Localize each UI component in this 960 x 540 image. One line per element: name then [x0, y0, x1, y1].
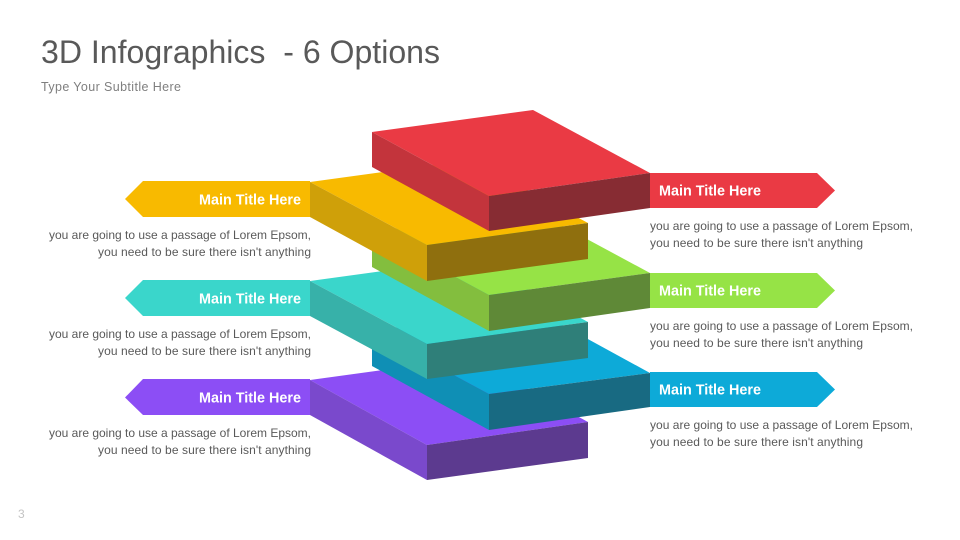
text block: red: you need to be sure there isn't anything — [650, 236, 863, 250]
slab: purple — [310, 358, 588, 480]
slab: red — [372, 110, 650, 231]
text block: blue — [650, 418, 913, 449]
banner: teal left: Main Title Here — [199, 292, 301, 308]
slab: green — [372, 210, 650, 331]
banner: teal left — [125, 280, 310, 316]
subtitle: Type Your Subtitle Here — [41, 80, 181, 94]
text block: green: you need to be sure there isn't anything — [650, 336, 863, 350]
text block: yellow — [49, 228, 311, 259]
text block: purple: you need to be sure there isn't anything — [98, 443, 311, 457]
banner: green right — [650, 273, 835, 308]
slab: teal — [310, 259, 588, 379]
banner: red right — [650, 173, 835, 208]
banner: purple left — [125, 379, 310, 415]
banner: blue right: Main Title Here — [659, 382, 761, 398]
text block: red: you are going to use a passage of Lorem Epsom, — [650, 219, 913, 233]
slab: yellow — [310, 160, 588, 281]
slab: blue — [372, 309, 650, 430]
text block: blue: you are going to use a passage of Lorem Epsom, — [650, 418, 913, 432]
page number: 3 — [18, 507, 25, 521]
text block: yellow: you are going to use a passage of Lorem Epsom, — [49, 228, 311, 242]
text block: purple — [49, 426, 311, 457]
text block: purple: you are going to use a passage of Lorem Epsom, — [49, 426, 311, 440]
text block: blue: you need to be sure there isn't anything — [650, 435, 863, 449]
banner: blue right — [650, 372, 835, 407]
text block: teal: you need to be sure there isn't anything — [98, 344, 311, 358]
title: 3D Infographics - 6 Options — [41, 34, 440, 70]
banner: purple left: Main Title Here — [199, 390, 301, 406]
text block: teal: you are going to use a passage of Lorem Epsom, — [49, 327, 311, 341]
banner: yellow left — [125, 181, 310, 217]
banner: yellow left: Main Title Here — [199, 192, 301, 208]
text block: yellow: you need to be sure there isn't anything — [98, 245, 311, 259]
text block: green — [650, 319, 913, 350]
text block: red — [650, 219, 913, 250]
text block: green: you are going to use a passage of Lorem Epsom, — [650, 319, 913, 333]
banner: red right: Main Title Here — [659, 184, 761, 200]
banner: green right: Main Title Here — [659, 284, 761, 300]
text block: teal — [49, 327, 311, 358]
